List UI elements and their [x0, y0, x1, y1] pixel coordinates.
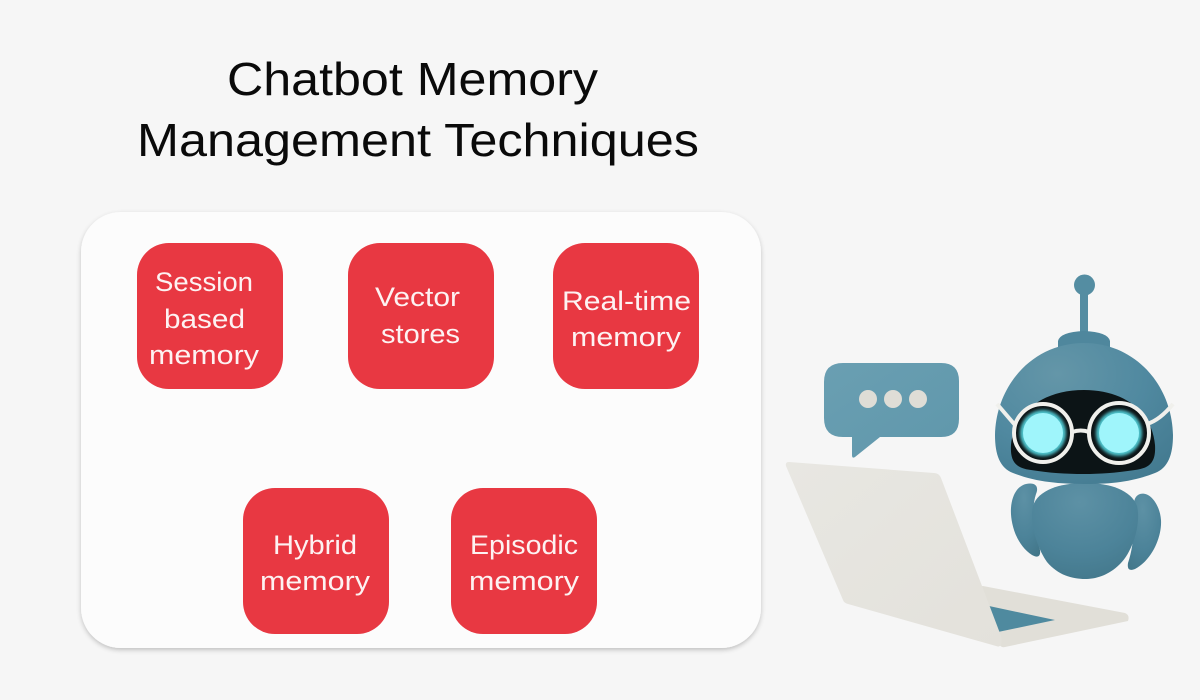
card: episodic memory: Episodic	[470, 530, 578, 560]
robot face screen	[1011, 390, 1155, 474]
card: vector stores: stores	[381, 319, 460, 349]
card: real-time memory: memory	[571, 322, 682, 352]
laptop keyboard	[989, 606, 1055, 632]
card: hybrid memory: Hybrid	[273, 530, 357, 560]
card: vector stores: Vector	[375, 282, 460, 312]
icon: robot	[995, 274, 1173, 579]
card: vector stores	[348, 243, 494, 389]
icon: laptop	[786, 462, 1129, 647]
card: hybrid memory	[243, 488, 389, 634]
card: session based memory: based	[164, 304, 245, 334]
card: hybrid memory: memory	[260, 566, 371, 596]
card: episodic memory: memory	[469, 566, 580, 596]
card: real-time memory: Real-time	[562, 286, 691, 316]
robot glowing eyes	[1020, 410, 1142, 456]
robot head	[995, 343, 1173, 484]
robot head cap	[1058, 331, 1110, 350]
robot antenna	[1074, 274, 1095, 336]
title	[137, 53, 699, 166]
laptop base	[960, 586, 1129, 647]
card: real-time memory	[553, 243, 699, 389]
icon: speech bubble	[824, 363, 959, 458]
card: session based memory	[137, 243, 283, 389]
laptop screen	[786, 462, 1001, 647]
robot right arm	[1128, 494, 1161, 570]
robot body	[1032, 483, 1138, 579]
title: Chatbot Memory	[227, 53, 598, 105]
robot glasses	[997, 403, 1173, 463]
panel: memory techniques	[81, 212, 761, 648]
card: session based memory: memory	[149, 340, 260, 370]
card: episodic memory	[451, 488, 597, 634]
title: Management Techniques	[137, 114, 699, 166]
robot left arm	[1011, 484, 1040, 557]
card: session based memory: Session	[155, 267, 253, 297]
